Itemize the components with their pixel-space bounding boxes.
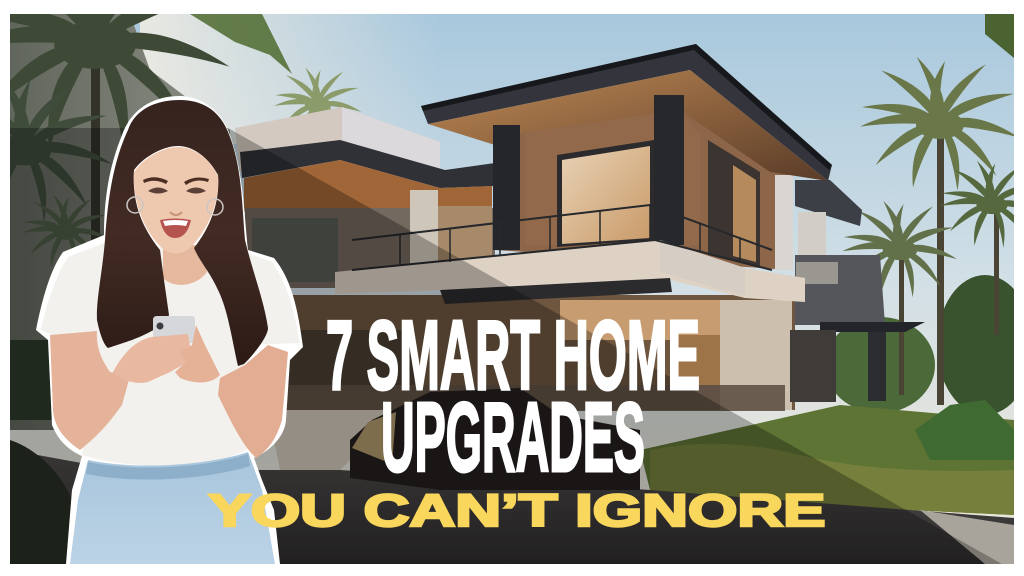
right hand bbox=[175, 325, 220, 383]
driveway bbox=[10, 450, 1014, 564]
balcony slab bbox=[335, 240, 805, 302]
lower railing bbox=[285, 385, 785, 411]
left wing eave bbox=[244, 160, 492, 215]
left wing glass bbox=[245, 208, 495, 288]
earrings bbox=[127, 197, 223, 215]
woman cutout bbox=[36, 96, 303, 564]
sunlit haze near left of house bbox=[140, 14, 440, 144]
porch soffit beam bbox=[440, 278, 672, 304]
face bbox=[134, 147, 218, 254]
title bbox=[208, 300, 826, 536]
eyes bbox=[148, 188, 206, 194]
hair bbox=[97, 100, 268, 366]
balcony railing bbox=[352, 205, 772, 270]
car bbox=[350, 388, 640, 490]
plant silhouette lower left bbox=[10, 440, 78, 564]
eyebrows bbox=[143, 177, 209, 185]
garden and shrubs bbox=[640, 405, 1014, 515]
belt line bbox=[86, 454, 250, 480]
right side glass bbox=[708, 140, 760, 268]
diagonal dark overlay bbox=[10, 128, 1002, 564]
left arm bbox=[50, 331, 130, 450]
top roof wooden eave bbox=[428, 70, 828, 181]
right background trees bbox=[825, 53, 1024, 415]
mouth bbox=[160, 218, 191, 238]
main upper glass door bbox=[557, 140, 654, 247]
white sticker outline bbox=[36, 96, 303, 564]
house bbox=[235, 44, 925, 411]
right arm bbox=[218, 345, 288, 458]
subtitle: YOU CAN’T IGNORE bbox=[208, 485, 826, 536]
left wing roof bbox=[240, 140, 495, 188]
phone bbox=[153, 316, 195, 343]
main upper wall bbox=[495, 80, 790, 270]
jeans bbox=[70, 452, 275, 564]
lower floor bbox=[285, 295, 795, 410]
left background palms and foliage bbox=[0, 0, 1014, 420]
right wing bbox=[795, 180, 862, 226]
left wall behind woman bbox=[10, 14, 230, 430]
title: UPGRADES bbox=[381, 382, 645, 492]
neck bbox=[163, 245, 207, 285]
nose bbox=[170, 212, 182, 215]
front columns bbox=[493, 125, 520, 250]
left wing parapet bbox=[235, 107, 440, 172]
top roof fascia bbox=[421, 44, 832, 181]
t-shirt bbox=[41, 243, 300, 466]
left hand bbox=[113, 334, 190, 383]
